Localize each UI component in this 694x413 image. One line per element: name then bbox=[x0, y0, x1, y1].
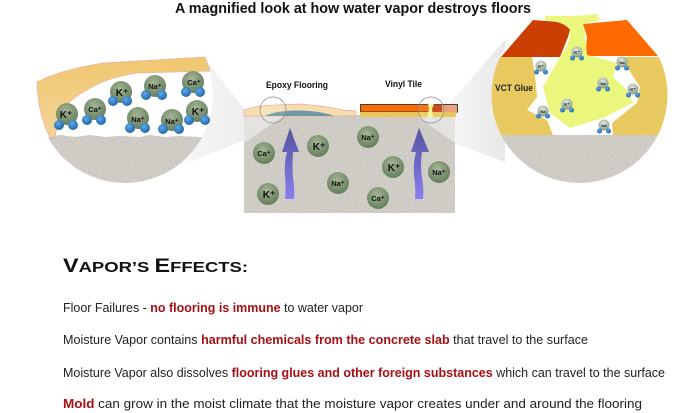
ion: K+: K⁺ bbox=[313, 142, 325, 153]
orange tile section bbox=[583, 20, 658, 56]
vinyl tile bbox=[360, 104, 458, 117]
molecule: Na+ bbox=[615, 56, 629, 70]
ion: Ca+: Ca⁺ bbox=[257, 149, 271, 158]
light cone overlays on slab bbox=[244, 115, 285, 143]
molecule: K+ bbox=[184, 100, 210, 125]
molecule: Na+: Na bbox=[600, 81, 606, 86]
molecule: Na+ bbox=[536, 106, 550, 118]
molecule: K+: K⁺ bbox=[60, 110, 72, 121]
heading: Vapor's Effects: VAPOR’S EFFECTS: bbox=[63, 256, 248, 277]
molecule: K+ bbox=[570, 46, 584, 60]
label: VCT Glue: VCT Glue bbox=[495, 83, 533, 94]
ion: Ca+: Ca⁺ bbox=[371, 194, 385, 203]
arrow: vapor rising left bbox=[282, 128, 299, 199]
text: effect 3: Moisture Vapor also dissolves flooring glues and other foreign substances which can travel to the surface bbox=[63, 365, 665, 380]
dissolved glue blob bbox=[543, 14, 633, 128]
concrete slab, right detail bbox=[501, 135, 658, 183]
molecule: K+: K⁺ bbox=[116, 88, 128, 99]
molecule: Na+: Na bbox=[619, 60, 625, 65]
molecule: Na+ bbox=[125, 107, 150, 133]
molecule: Na+: Na bbox=[601, 123, 607, 128]
ion: Na+: Na⁺ bbox=[361, 133, 375, 142]
epoxy flooring layer bbox=[244, 104, 356, 116]
molecule: Na+ bbox=[596, 78, 610, 92]
molecule: K+: K⁺ bbox=[564, 102, 570, 107]
molecule: Ca+ bbox=[82, 98, 106, 125]
panel: right magnified vinyl detail bbox=[492, 14, 668, 183]
ion: Ca+ bbox=[367, 187, 389, 209]
molecule: Ca+: Ca⁺ bbox=[187, 78, 201, 87]
molecule: Na+: Na bbox=[540, 109, 546, 114]
panel: left magnified epoxy detail bbox=[36, 32, 213, 183]
molecule: Ca+ bbox=[181, 71, 205, 97]
molecule: K+: K⁺ bbox=[574, 50, 580, 55]
text: effect 1: Floor Failures - no flooring is immune to water vapor bbox=[63, 300, 364, 315]
molecule: K+: K⁺ bbox=[538, 64, 544, 69]
label: Vinyl Tile: Vinyl Tile bbox=[385, 79, 422, 90]
title: A magnified look at how water vapor destroys floors bbox=[175, 1, 531, 17]
ion: K+ bbox=[382, 156, 404, 178]
ion: K+: K⁺ bbox=[388, 163, 400, 174]
magnification cone: left bbox=[183, 30, 245, 163]
text: effect 2: Moisture Vapor contains harmful chemicals from the concrete slab that travel to the surface bbox=[63, 332, 588, 347]
ion: Ca+ bbox=[253, 142, 275, 164]
ion: Na+: Na⁺ bbox=[331, 179, 345, 188]
ion: Na+ bbox=[327, 172, 349, 194]
molecule: K+ bbox=[626, 84, 640, 98]
molecule: Na+: Na⁺ bbox=[131, 115, 145, 124]
molecule: Na+ bbox=[597, 120, 611, 134]
dark red tile section bbox=[501, 20, 572, 57]
molecule: Na+ bbox=[141, 75, 167, 100]
ion: K+ bbox=[307, 135, 329, 157]
molecule: Na+: Na⁺ bbox=[148, 82, 162, 91]
ion: Na+: Na⁺ bbox=[432, 168, 446, 177]
magnifier ring: vinyl bbox=[418, 97, 444, 123]
molecule: K+ bbox=[108, 81, 132, 106]
void in glue bbox=[527, 57, 640, 135]
ion: K+: K⁺ bbox=[263, 190, 275, 201]
molecule: K+: K⁺ bbox=[192, 107, 204, 118]
label: Epoxy Flooring: Epoxy Flooring bbox=[266, 80, 328, 91]
molecule: K+ bbox=[54, 103, 78, 130]
molecule: Na+: Na⁺ bbox=[165, 117, 179, 126]
magnification cone: right bbox=[445, 40, 505, 162]
ion: Na+ bbox=[428, 161, 450, 183]
ion: Na+ bbox=[357, 126, 379, 148]
arrow: vapor rising right bbox=[411, 128, 429, 199]
molecule: K+ bbox=[560, 98, 574, 112]
molecule: Ca+: Ca⁺ bbox=[88, 105, 102, 114]
ion: K+ bbox=[257, 183, 279, 205]
panel: center cross-section bbox=[244, 79, 458, 213]
glue layer bbox=[485, 57, 675, 136]
text: effect 4: Mold can grow in the moist climate that the moisture vapor creates under and around the flooring bbox=[63, 396, 642, 411]
epoxy layer bbox=[37, 57, 210, 137]
magnifier ring: epoxy bbox=[260, 97, 286, 123]
concrete slab, left detail bbox=[48, 135, 202, 183]
water vapor pool under epoxy bbox=[265, 110, 334, 116]
concrete slab, center bbox=[244, 115, 455, 213]
molecule: K+ bbox=[534, 60, 548, 74]
molecule: K+: K⁺ bbox=[630, 87, 636, 92]
molecule: Na+ bbox=[158, 109, 184, 134]
